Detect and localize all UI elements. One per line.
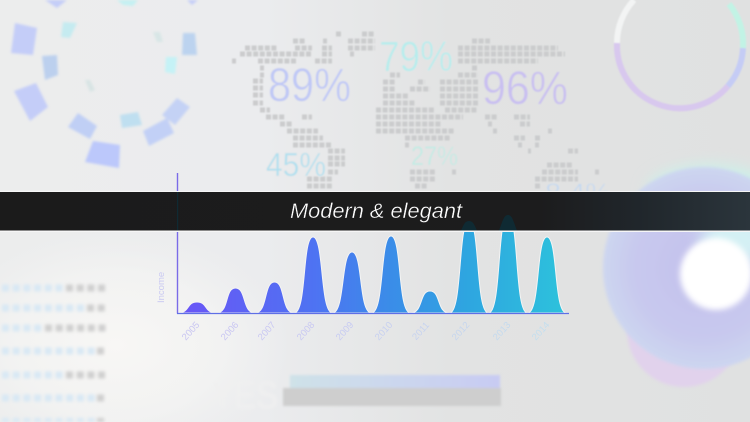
row 5 xyxy=(2,372,106,378)
row 4 xyxy=(2,348,106,354)
percentage labels xyxy=(266,33,611,208)
x axis labels xyxy=(180,320,552,343)
circle: pale cyan highlight xyxy=(701,214,750,266)
x axis labels: 2006 xyxy=(219,320,241,343)
percentage: 96%: 96% xyxy=(482,61,568,114)
overlapping glowing circles xyxy=(603,166,750,387)
row 1 xyxy=(2,284,106,292)
x axis labels: 2005 xyxy=(180,320,202,343)
circle: pink xyxy=(627,273,741,387)
ring of faded squares xyxy=(11,0,198,168)
row 3 xyxy=(2,324,106,332)
axis title: Income xyxy=(156,272,167,303)
dotted world map xyxy=(232,34,599,186)
progress ring xyxy=(617,0,743,108)
x axis labels: 2009 xyxy=(334,320,356,343)
x axis labels: 2007 xyxy=(256,320,278,343)
percentage: 45%: 45% xyxy=(266,146,326,183)
row 2 xyxy=(2,304,106,312)
x axis labels: 2008 xyxy=(295,320,317,343)
percentage: 79%: 79% xyxy=(379,33,453,81)
percentage: 27%: 27% xyxy=(411,141,458,171)
band edge xyxy=(0,191,750,232)
circle: mint glow xyxy=(648,166,750,218)
bar: grey xyxy=(283,388,501,406)
faded horizontal bars xyxy=(283,375,501,406)
faded YES label: YES xyxy=(212,375,278,417)
x axis labels: 2010 xyxy=(373,320,395,343)
circle: large lilac xyxy=(603,167,750,369)
title text: Modern & elegant xyxy=(290,200,463,223)
dotted rating rows xyxy=(2,288,106,420)
chart peaks xyxy=(178,215,566,313)
x axis labels: 2014 xyxy=(530,320,552,343)
percentage: partly hidden: 8.4% xyxy=(545,178,611,208)
x axis labels: 2012 xyxy=(450,320,472,343)
axis: vertical xyxy=(176,173,178,314)
x axis labels: 2011 xyxy=(410,320,432,343)
x axis labels: 2013 xyxy=(491,320,513,343)
circle: white glow xyxy=(680,238,750,310)
row 6 xyxy=(2,394,106,402)
axis: horizontal xyxy=(177,312,569,314)
title band xyxy=(0,191,750,232)
band fill xyxy=(0,192,750,230)
income bar chart xyxy=(156,173,569,343)
percentage: 89%: 89% xyxy=(268,58,351,111)
chart seen through band xyxy=(177,192,517,230)
row 7 xyxy=(2,418,106,422)
bar: blue xyxy=(290,375,500,390)
